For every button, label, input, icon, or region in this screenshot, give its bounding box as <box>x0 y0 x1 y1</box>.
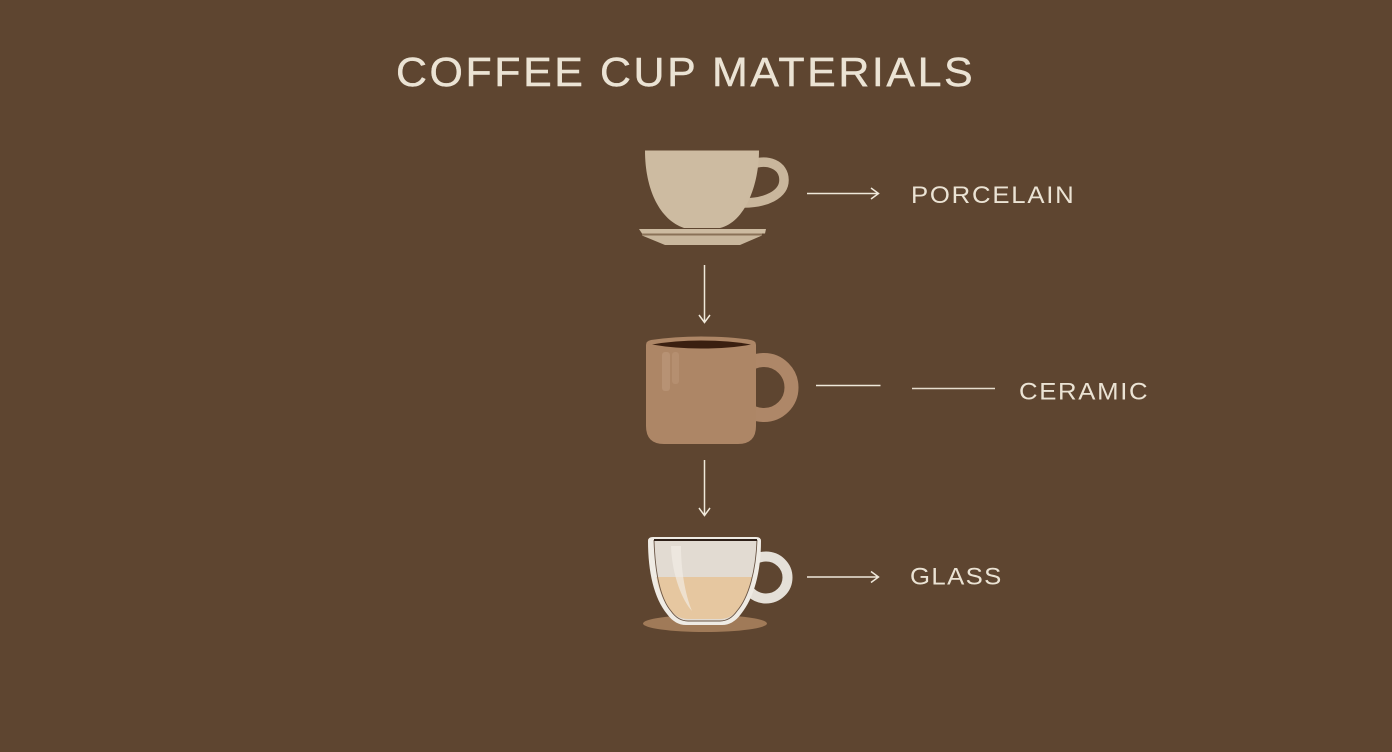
arrow: ceramic to glass <box>699 460 710 516</box>
icon: glass cup <box>643 537 788 632</box>
label: porcelain: PORCELAIN <box>911 182 1074 209</box>
icon: porcelain cup <box>639 150 784 245</box>
label: ceramic: CERAMIC <box>1019 378 1148 405</box>
icon: ceramic mug <box>646 336 792 444</box>
label: glass: GLASS <box>910 563 1001 590</box>
line: ceramic connector right <box>912 388 995 390</box>
title: COFFEE CUP MATERIALS <box>396 49 973 95</box>
arrow: glass to label <box>807 572 878 582</box>
arrow: porcelain to ceramic <box>699 265 710 322</box>
line: ceramic connector left <box>816 384 880 386</box>
arrow: porcelain to label <box>807 188 878 199</box>
